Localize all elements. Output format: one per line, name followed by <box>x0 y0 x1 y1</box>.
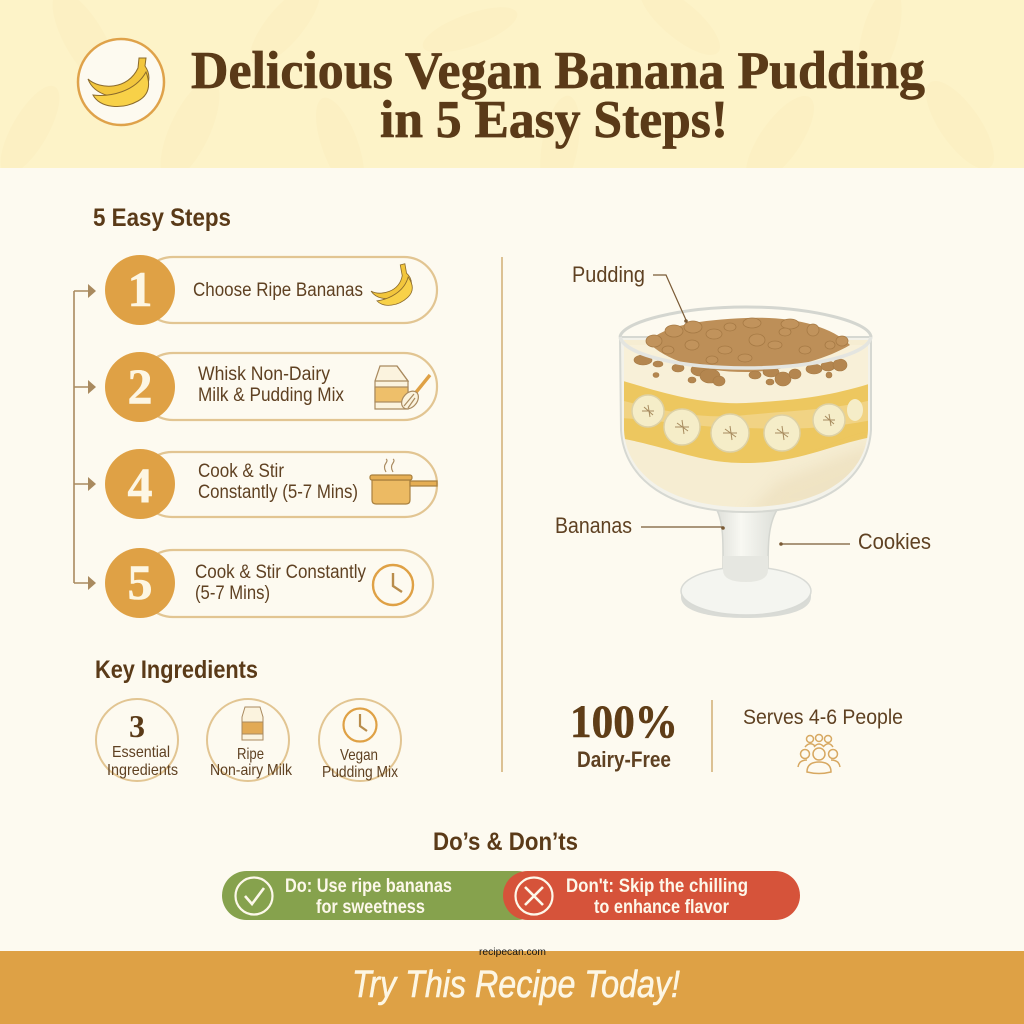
stat: 100% dairy-free <box>570 696 678 772</box>
title <box>191 42 925 149</box>
watermark: recipecan.com <box>479 947 546 958</box>
glass foot <box>681 556 811 618</box>
connector arrows <box>74 284 96 590</box>
ingredient: essential count <box>96 699 178 781</box>
step 2: Whisk Non-Dairy <box>198 364 330 385</box>
glass rim <box>620 307 871 368</box>
icon: clock <box>373 565 413 605</box>
heading: Do's and Don'ts: Do’s & Don’ts <box>433 828 578 856</box>
label: Bananas: Bananas <box>555 513 632 538</box>
ingredient: pudding mix: Vegan <box>340 747 378 764</box>
ingredient: essential count: Ingredients <box>107 762 178 779</box>
panel: don't: to enhance flavor <box>594 897 730 918</box>
ingredient: essential count: Essential <box>112 744 170 761</box>
step 1: 1 <box>128 261 152 317</box>
panel: do <box>222 871 542 920</box>
pudding layers <box>624 340 868 507</box>
icon: people <box>798 734 840 774</box>
panel: don't <box>503 871 800 920</box>
icon: carton and whisk <box>375 366 430 412</box>
ingredient: pudding mix: Pudding Mix <box>322 764 398 781</box>
step 3: 4 <box>128 457 152 513</box>
icon: milk carton <box>242 707 263 740</box>
heading: Key Ingredients: Key Ingredients <box>95 656 258 684</box>
icon: cross <box>516 878 552 914</box>
step 1: Choose Ripe Bananas <box>193 280 363 301</box>
stat: 100% dairy-free: 100% <box>570 696 678 748</box>
label: Pudding: Pudding <box>572 262 645 287</box>
ingredient: milk: Ripe <box>237 746 264 763</box>
footer banner: Try This Recipe Today! <box>352 964 680 1006</box>
title: Delicious Vegan Banana Pudding <box>191 42 925 100</box>
header banner <box>0 0 1024 168</box>
step 1 <box>105 255 437 325</box>
label: Cookies: Cookies <box>858 529 931 554</box>
heading: 5 Easy Steps: 5 Easy Steps <box>93 204 231 232</box>
panel: don't: Don't: Skip the chilling <box>566 876 748 897</box>
icon: check <box>236 878 272 914</box>
banana slices <box>632 395 863 452</box>
panel: do: Do: Use ripe bananas <box>285 876 452 897</box>
ingredient: pudding mix <box>319 699 401 781</box>
glass stem <box>717 510 777 582</box>
footer banner <box>0 951 1024 1024</box>
icon: banana badge <box>78 39 164 125</box>
label: Bananas <box>555 513 725 538</box>
step 3 <box>105 449 437 519</box>
cookie crumble <box>634 318 850 386</box>
step 2: 2 <box>128 358 152 414</box>
ingredient: milk <box>207 699 293 781</box>
title: in 5 Easy Steps! <box>380 91 728 149</box>
step 4: (5-7 Mins) <box>195 583 270 604</box>
label: Pudding <box>572 262 688 323</box>
step 3: Constantly (5-7 Mins) <box>198 482 358 503</box>
panel: do: for sweetness <box>316 897 425 918</box>
illustration: banana pudding trifle <box>620 307 872 618</box>
step 4: 5 <box>128 554 152 610</box>
step 3: Cook & Stir <box>198 461 285 482</box>
step 2 <box>105 352 437 422</box>
stat: serves 4-6 people: Serves 4-6 People <box>743 706 903 729</box>
step 4 <box>105 548 433 618</box>
label: Cookies <box>779 529 931 554</box>
ingredient: essential count: 3 <box>129 708 145 744</box>
stat: serves 4-6 people <box>743 706 903 774</box>
icon: banana <box>367 263 416 309</box>
glass bowl <box>620 337 871 512</box>
icon: clock small <box>344 708 376 742</box>
icon: pot <box>370 459 437 504</box>
step 4: Cook & Stir Constantly <box>195 562 366 583</box>
ingredient: milk: Non-airy Milk <box>210 762 293 779</box>
stat: 100% dairy-free: Dairy-Free <box>577 747 671 772</box>
step 2: Milk & Pudding Mix <box>198 385 344 406</box>
